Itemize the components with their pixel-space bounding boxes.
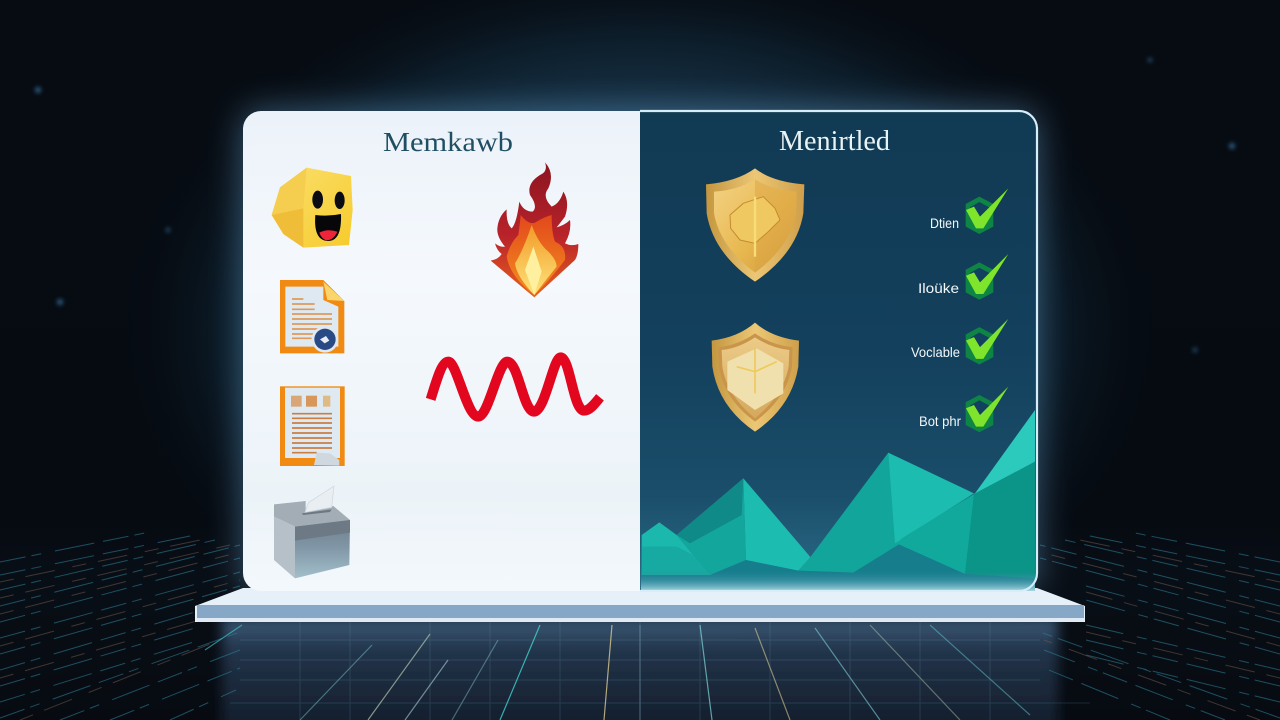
- icon: flame: [491, 162, 578, 297]
- item: Bot phr: [919, 387, 1008, 432]
- wave: red zigzag: [431, 357, 600, 417]
- item: Dtien: [930, 188, 1008, 234]
- item: Voclable: [911, 319, 1008, 364]
- icon: gold shield top: [706, 168, 804, 282]
- panel: comparison card: [243, 111, 1037, 591]
- checklist: [911, 188, 1008, 432]
- icon: ballot box: [274, 486, 350, 578]
- item: Bot phr: Bot phr: [919, 413, 961, 429]
- item: Iloüke: Iloüke: [918, 280, 959, 296]
- item: Dtien: Dtien: [930, 215, 959, 231]
- display stand base: [195, 588, 1085, 622]
- panel glow: [240, 108, 1040, 594]
- icon: report document: [280, 386, 345, 466]
- icon: smiley cube: [272, 168, 353, 248]
- floor: perspective data grid: [0, 520, 1280, 720]
- icon: document with seal: [280, 280, 344, 353]
- chart: teal faceted area: [641, 410, 1035, 591]
- right panel: dark side: [640, 111, 1037, 591]
- panel outline: [640, 111, 1037, 591]
- item: Iloüke: [918, 254, 1008, 300]
- left panel: light side: [243, 111, 640, 591]
- icon: gold shield bottom: [712, 323, 799, 432]
- heading: left: Memkawb: [383, 127, 513, 157]
- item: Voclable: Voclable: [911, 344, 960, 360]
- heading: right: Menirtled: [779, 126, 890, 157]
